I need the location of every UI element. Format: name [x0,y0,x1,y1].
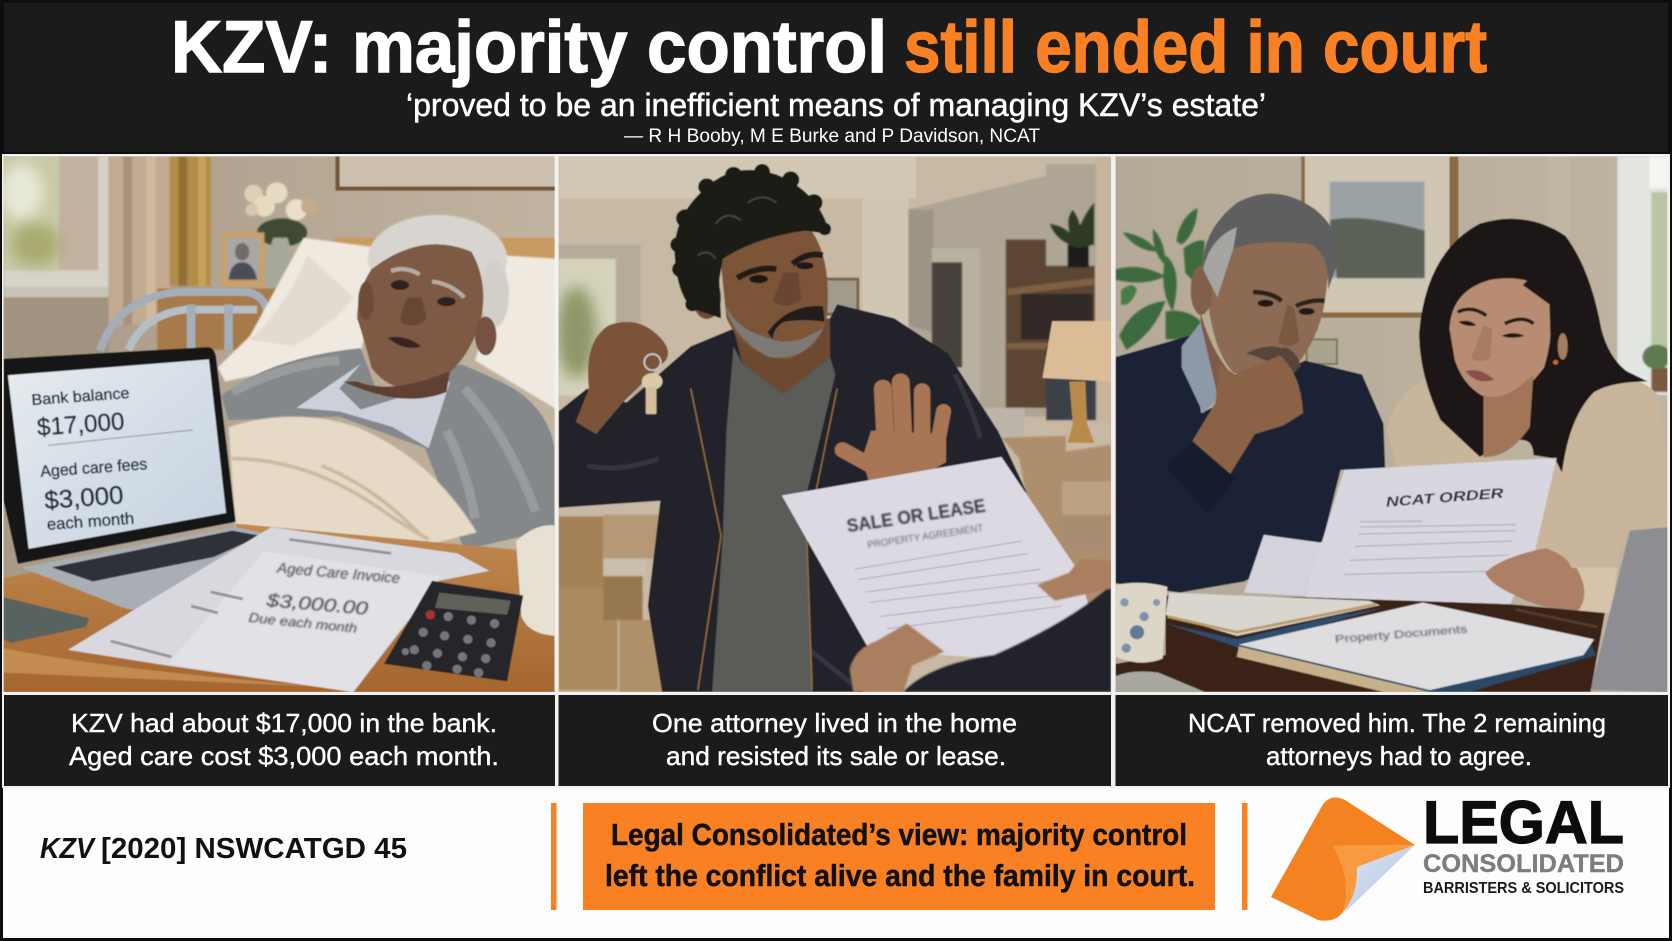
caption 3 [1188,708,1606,771]
lamp [1042,321,1111,443]
quote subtitle: ‘proved to be an inefficient means of managing KZV’s estate’ [406,87,1266,123]
hoodie [559,304,1026,692]
caption panels [4,695,1668,786]
laptop screen with text: $3,000 [43,482,124,515]
caption 2 [652,708,1017,771]
window [557,245,641,396]
orange divider left [551,803,556,910]
NCAT order paper [1305,458,1557,604]
face [720,224,828,360]
caption 1 [69,708,499,771]
framed landscape [1301,156,1458,318]
logo wordmark: BARRISTERS & SOLICITORS [1423,880,1624,897]
phone [4,597,89,643]
curtains [109,156,211,325]
NCAT order paper: NCAT ORDER [1385,485,1505,510]
attribution: — R H Booby, M E Burke and P Davidson, NCAT [624,126,1040,147]
attorney figure [559,164,1026,692]
cardigan [221,348,555,550]
logo wordmark: CONSOLIDATED [1423,850,1624,878]
other person's hands and sleeve [850,559,1111,692]
hand on chin [1192,355,1303,474]
panel: attorney with keys resisting sale [555,150,1116,700]
case citation: [2020] NSWCATGD 45 [101,833,407,865]
bedside table [157,289,282,350]
hair back [1419,219,1648,473]
woman's hand [1485,548,1591,611]
pillows [218,238,557,410]
saucer reflection [1116,671,1205,692]
sweater [1116,336,1385,593]
title: KZV: majority control [171,7,887,88]
calculator [384,581,523,681]
framed picture [826,279,858,314]
caption 3: attorneys had to agree. [1266,741,1532,771]
papers and invoice: $3,000.00 [264,589,370,619]
neck and face [1199,308,1232,403]
tray table [4,524,555,692]
icon: folded page [1271,798,1415,921]
laptop screen with text [4,347,236,564]
laptop screen with text: Aged care fees [40,455,148,481]
plant [1116,208,1205,350]
agreement paper: PROPERTY AGREEMENT [866,522,985,551]
raised key hand [576,322,668,434]
case citation: KZV [40,833,96,865]
property documents folder [1235,602,1596,692]
grey hair [1203,194,1339,297]
KZV head [343,215,509,399]
agreement paper [782,457,1089,659]
zipper lines [691,389,837,690]
keys [644,354,661,370]
left folder [1166,593,1383,648]
bed rail [100,292,268,351]
laptop screen with text: Bank balance [31,385,130,409]
mug [516,525,555,636]
property documents folder: Property Documents [1335,624,1468,646]
flowers and vase [221,182,317,289]
headboard [334,238,559,259]
logo wordmark: LEGAL [1423,789,1624,856]
window [0,156,109,360]
doorway and room beyond [908,164,1098,436]
neck [734,318,830,394]
orange divider right [1242,803,1248,910]
man figure [1116,194,1385,593]
callout: Legal Consolidated's view: Legal Consolidated’s view: majority control [611,817,1187,852]
papers and invoice: Aged Care Invoice [275,561,401,587]
raised stop hand [842,382,944,466]
agreement paper: SALE OR LEASE [845,495,987,536]
hoodie sleeve right edge [978,432,1024,486]
caption 1: Aged care cost $3,000 each month. [69,741,499,771]
table [1116,595,1605,692]
caption 2: and resisted its sale or lease. [666,741,1006,771]
panel: two remaining attorneys reading NCAT order [1112,150,1672,700]
small page [1244,535,1323,596]
cardboard boxes [559,436,1111,692]
logo: Legal Consolidated [1271,789,1624,921]
callout: Legal Consolidated's view: left the conflict alive and the family in court. [605,858,1195,893]
blanket [229,417,477,545]
laptop [1591,527,1668,692]
callout: Legal Consolidated's view [583,803,1215,910]
woman figure [1386,219,1668,613]
caption 3: NCAT removed him. The 2 remaining [1188,708,1606,738]
laptop screen with text: $17,000 [36,409,125,442]
caption 1: KZV had about $17,000 in the bank. [71,708,497,738]
t-shirt [712,346,835,692]
title: still ended in court [904,7,1487,88]
sweater [1386,374,1668,613]
window [1617,156,1671,395]
wall picture [337,154,559,189]
papers and invoice: Due each month [248,610,358,636]
collar [1182,322,1219,413]
papers and invoice [68,527,489,692]
face [1449,278,1551,401]
title [171,7,1487,88]
laptop screen with text: each month [46,510,135,534]
footer band [3,788,1669,938]
caption 2: One attorney lived in the home [652,708,1017,738]
white frame behind photos and captions [2,154,1670,788]
curly hair [670,164,831,318]
panel: photo of KZV in bed with laptop and invoice [0,150,560,700]
logo wordmark [1423,789,1624,897]
laptop base [21,527,275,610]
mug [1116,583,1167,663]
shirt [296,364,450,448]
header band [4,3,1668,152]
